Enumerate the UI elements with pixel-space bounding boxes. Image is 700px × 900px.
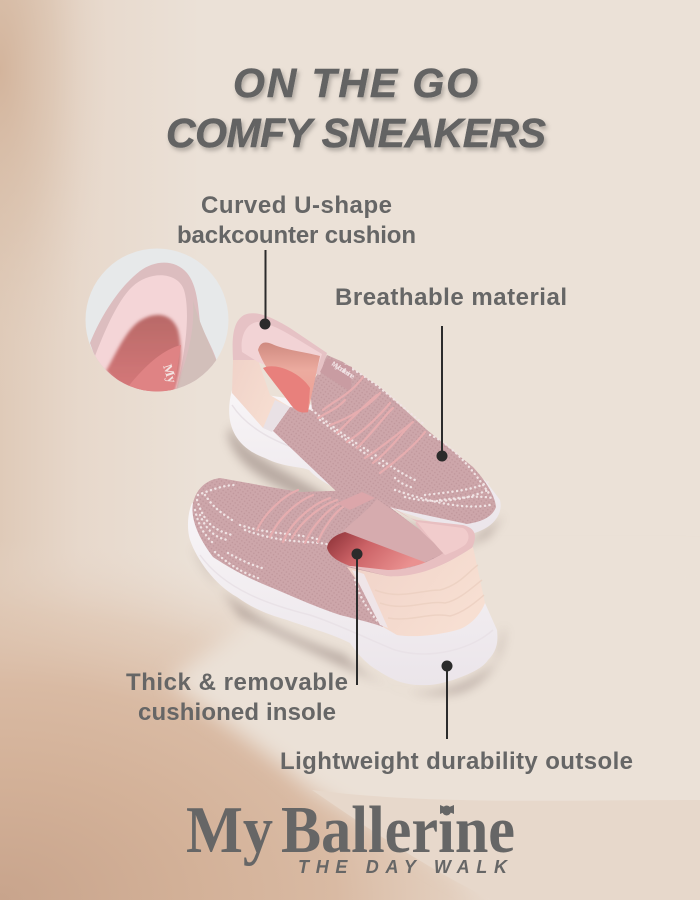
logo bow on the i	[440, 805, 454, 814]
shadow	[228, 425, 504, 549]
heel side panel	[177, 304, 216, 388]
sole	[188, 503, 497, 685]
lining	[417, 522, 469, 555]
callout: thick and removable cushioned insole: cushioned insole	[138, 699, 336, 726]
callout: thick and removable cushioned insole	[126, 548, 362, 726]
title: ON THE GO	[233, 60, 478, 106]
insole	[129, 345, 181, 392]
shadow	[192, 545, 505, 695]
callout: breathable material	[335, 284, 567, 462]
knit mesh upper	[273, 355, 496, 524]
title	[166, 60, 546, 156]
sole	[229, 390, 501, 534]
collar	[347, 498, 475, 577]
logo: My Ballerine The Day Walk: Ballerine	[281, 793, 515, 867]
title: COMFY SNEAKERS	[166, 110, 546, 156]
callout: curved U-shape backcounter cushion: backcounter cushion	[177, 222, 416, 249]
tongue logo	[320, 358, 352, 392]
logo: My Ballerine The Day Walk	[186, 793, 515, 877]
callout: thick and removable cushioned insole: Thick & removable	[126, 669, 348, 696]
insole	[327, 532, 427, 572]
callout: curved U-shape backcounter cushion: Curved U-shape	[201, 192, 392, 219]
insole logo: My	[160, 362, 180, 385]
heel tab	[263, 400, 290, 432]
heel panel	[232, 357, 290, 428]
collar	[233, 313, 327, 375]
pale lining	[95, 275, 187, 400]
logo: My Ballerine The Day Walk: THE DAY WALK	[298, 857, 509, 877]
shoe: upper right-facing sneaker	[228, 313, 504, 549]
logo: My Ballerine The Day Walk: My	[186, 793, 273, 867]
callout: lightweight durability outsole: Lightweight durability outsole	[280, 748, 633, 775]
shoe: lower left-facing sneaker	[188, 478, 505, 695]
callout: lightweight durability outsole	[280, 660, 633, 775]
sole edge	[232, 405, 350, 490]
inner mesh lining	[343, 499, 446, 563]
laces	[257, 490, 343, 543]
heel outer collar	[90, 263, 218, 400]
knit mesh upper	[192, 478, 445, 627]
side stripe	[352, 570, 388, 628]
laces	[318, 377, 425, 473]
detail circle: heel cushion close-up	[85, 248, 229, 400]
inner back	[258, 342, 320, 413]
callout: curved U-shape backcounter cushion	[177, 192, 416, 330]
knit speckles	[312, 365, 492, 507]
tongue fold	[337, 492, 375, 510]
insole	[263, 366, 310, 413]
heel panel	[347, 547, 485, 636]
heel ripples	[375, 565, 484, 619]
sole edge	[200, 555, 493, 654]
inner shoe dark	[106, 315, 181, 400]
knit speckles	[195, 485, 378, 622]
callout: breathable material: Breathable material	[335, 284, 567, 311]
shoe: upper right-facing sneaker: Myballerine	[330, 361, 356, 381]
lining	[242, 322, 322, 385]
